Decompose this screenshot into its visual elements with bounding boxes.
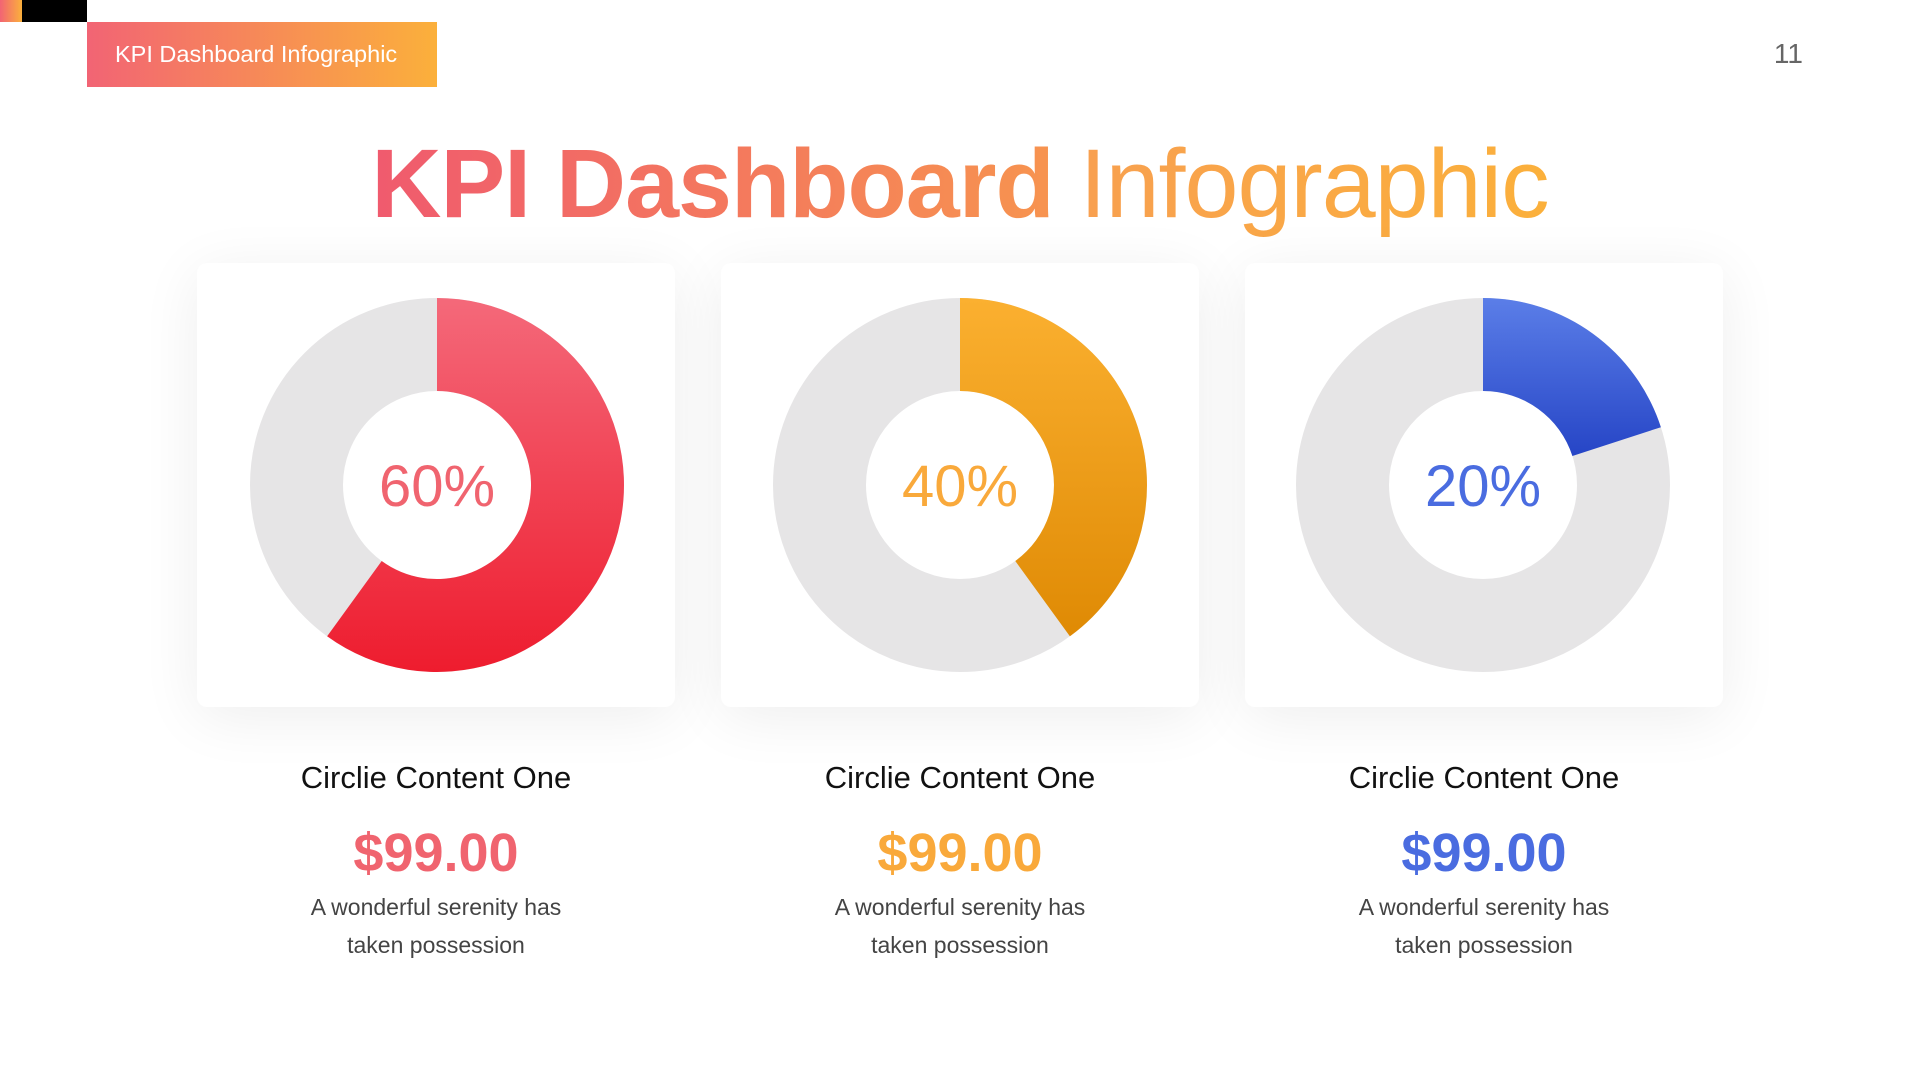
- description 2: [834, 894, 1085, 958]
- donut: 60%: [296, 298, 624, 672]
- description 3: A wonderful serenity has: [1359, 894, 1609, 920]
- description 1: A wonderful serenity has: [311, 894, 561, 920]
- panel: card 2: [721, 263, 1199, 707]
- panel: card 3: [1245, 263, 1723, 707]
- heading 2: Circlie Content One: [825, 760, 1095, 795]
- price 3: $99.00: [1401, 823, 1567, 883]
- description 1: taken possession: [347, 932, 525, 958]
- title: KPI Dashboard Infographic: [371, 129, 1549, 238]
- description 2: taken possession: [871, 932, 1049, 958]
- description 1: [310, 894, 561, 958]
- corner decoration: [0, 0, 87, 22]
- price 1: $99.00: [353, 823, 519, 883]
- donut: 40%: [820, 298, 1147, 636]
- donut: 40%: 40%: [902, 454, 1018, 519]
- page number: 11: [1774, 38, 1803, 69]
- text block: column 2: [825, 760, 1095, 958]
- text block: column 3: [1349, 760, 1619, 958]
- donut: 20%: [1342, 298, 1661, 626]
- donut: 60%: 60%: [379, 454, 495, 519]
- text block: column 1: [301, 760, 571, 958]
- heading 3: Circlie Content One: [1349, 760, 1619, 795]
- header tag: KPI Dashboard Infographic: [115, 41, 397, 67]
- description 3: taken possession: [1395, 932, 1573, 958]
- price 2: $99.00: [877, 823, 1043, 883]
- header tag: [87, 22, 437, 87]
- heading 1: Circlie Content One: [301, 760, 571, 795]
- donut: 20%: 20%: [1425, 454, 1541, 519]
- description 2: A wonderful serenity has: [835, 894, 1085, 920]
- panel: card 1: [197, 263, 675, 707]
- description 3: [1358, 894, 1609, 958]
